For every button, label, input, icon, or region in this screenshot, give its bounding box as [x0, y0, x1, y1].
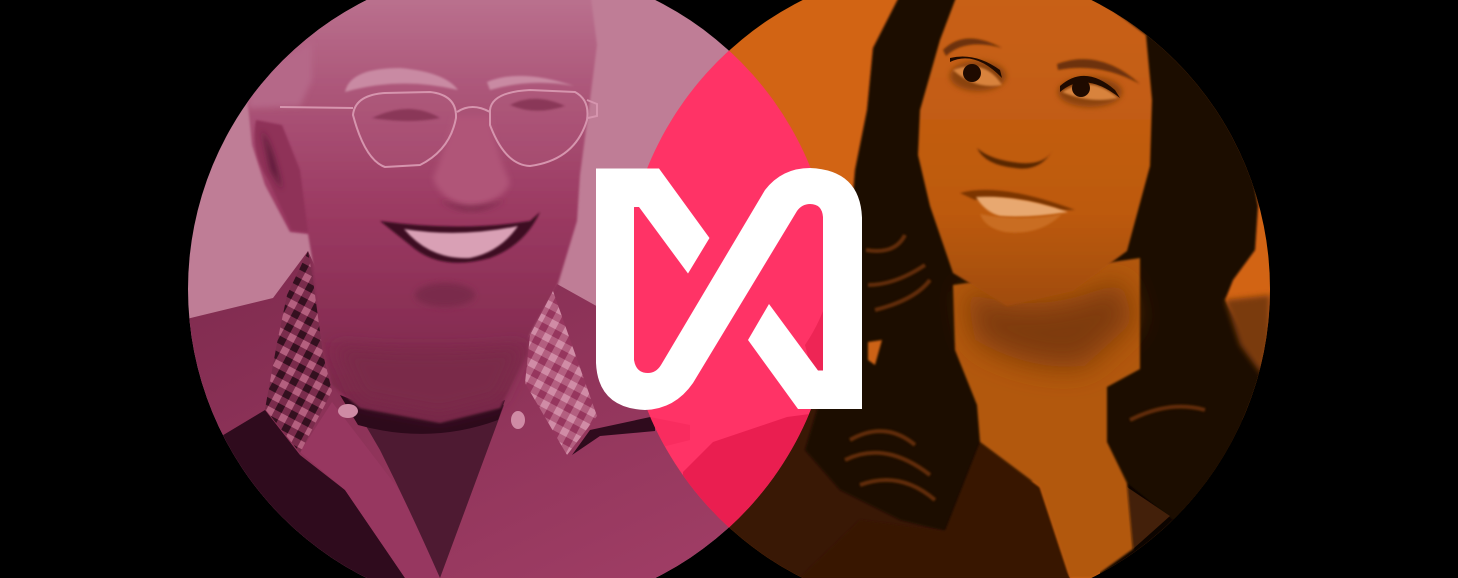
infographic scene — [188, 0, 1270, 578]
lower left dress and hair base — [648, 409, 1070, 578]
glasses — [280, 90, 597, 167]
eyes — [953, 66, 1118, 100]
nostril shadow — [446, 202, 498, 213]
teeth — [404, 226, 518, 258]
hair highlights — [845, 235, 1205, 500]
dress — [944, 442, 1070, 578]
dark shadow on left of shirt — [215, 410, 405, 578]
strands over right orange patch — [1225, 295, 1270, 375]
neck shadow — [383, 400, 504, 422]
ear inner — [262, 130, 282, 190]
buttons — [338, 404, 525, 429]
undershirt — [366, 405, 504, 578]
smile — [380, 212, 540, 263]
nose shadow — [977, 148, 1053, 169]
panel: left portrait circle — [188, 0, 729, 578]
eyebrows — [345, 68, 574, 92]
dark shadow under right collar — [572, 416, 655, 455]
right circle backdrop — [620, 0, 1280, 578]
eye shadows — [950, 61, 1122, 107]
face — [918, 0, 1152, 306]
panel: pink overlap lens — [620, 40, 840, 540]
white hair — [246, 52, 312, 108]
undershirt neckline — [340, 395, 505, 434]
chin shadow — [415, 283, 475, 307]
hair mass — [805, 0, 1300, 531]
nose — [433, 115, 510, 208]
collar right — [525, 291, 597, 455]
panel: right portrait circle — [610, 0, 1300, 578]
head and neck — [248, 0, 597, 423]
ear — [254, 120, 308, 232]
lens faint hair — [805, 290, 830, 372]
lens left tint — [640, 415, 690, 450]
orange gaps in hair — [868, 340, 882, 365]
logo mark — [596, 168, 862, 410]
lens fill — [620, 40, 840, 540]
pupils — [950, 56, 1120, 98]
left circle backdrop — [188, 0, 729, 578]
shirt — [189, 251, 729, 578]
collar left — [265, 251, 332, 453]
upper lip — [960, 190, 1075, 210]
eyebrows — [943, 38, 1140, 84]
lens lower tint — [683, 410, 840, 530]
lower right dark base — [1100, 420, 1242, 574]
eyes — [372, 99, 565, 121]
dress right — [1127, 487, 1170, 549]
neck — [953, 258, 1140, 578]
lower lip — [980, 214, 1062, 233]
neck shadow — [965, 280, 1135, 367]
shirt placket left — [300, 402, 405, 578]
teeth — [976, 197, 1068, 216]
